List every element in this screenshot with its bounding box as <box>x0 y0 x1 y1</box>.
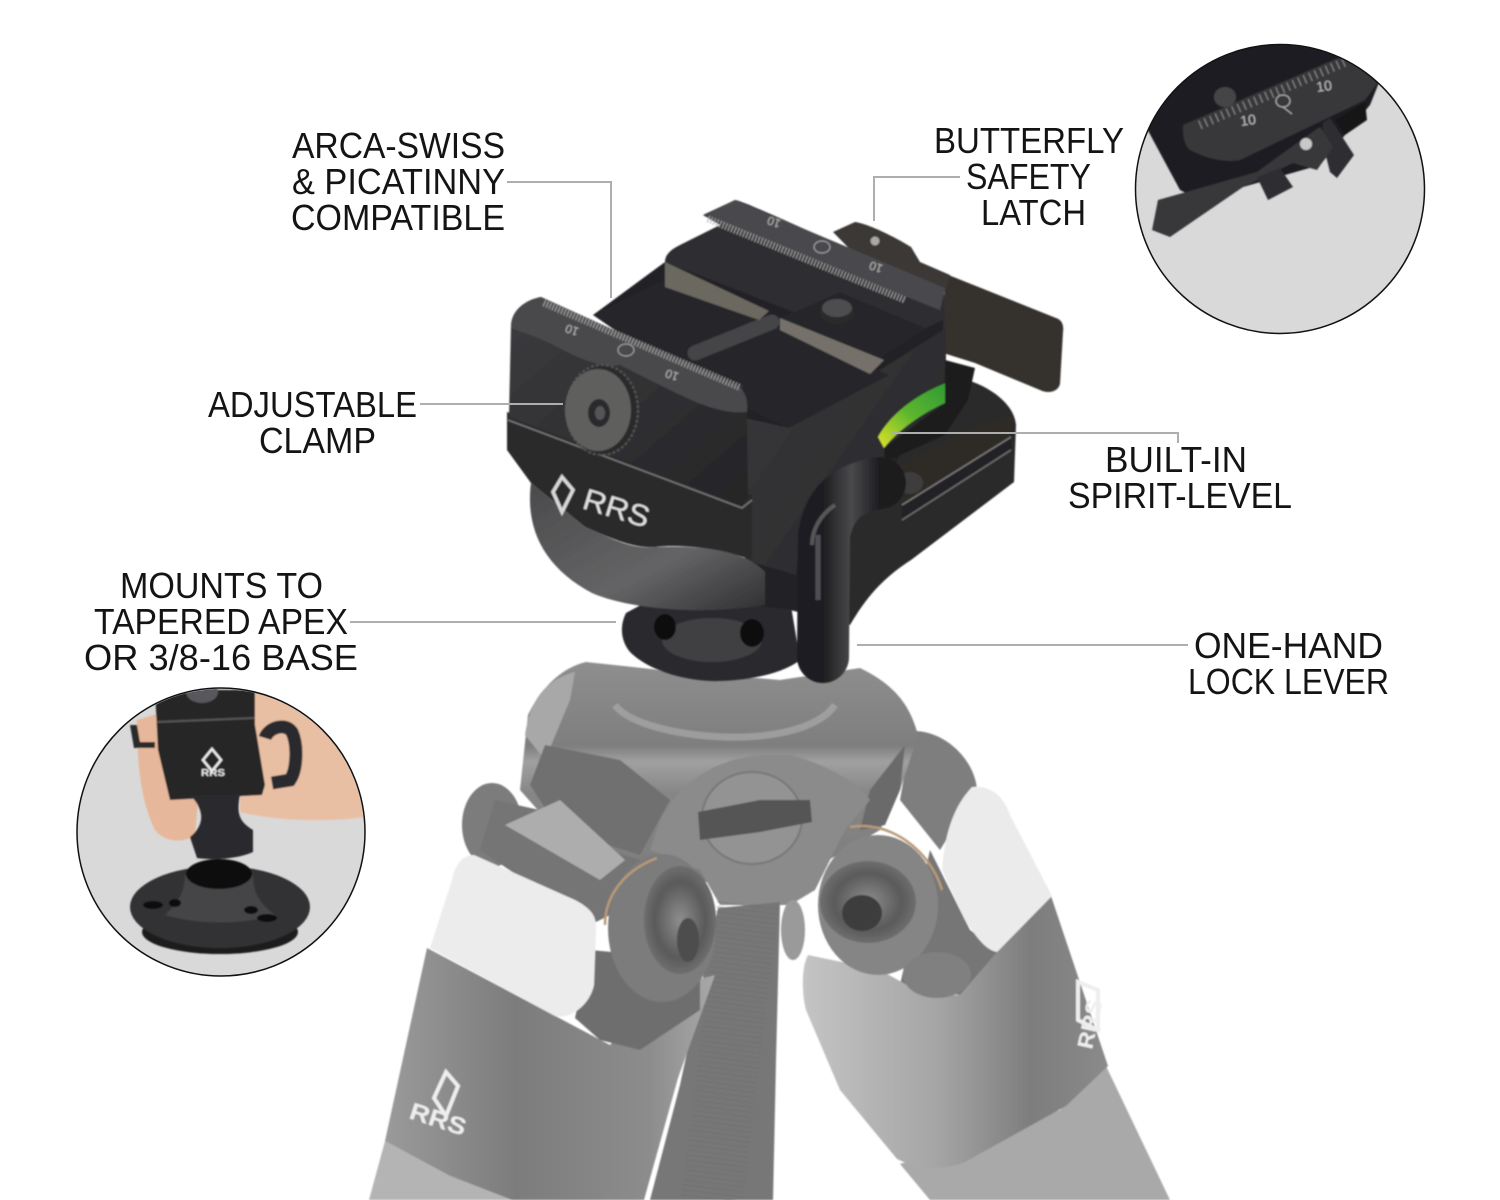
label: mounts to tapered apex <box>84 565 358 678</box>
faded tripod <box>369 662 1170 1200</box>
lever shadow arc highlight <box>615 705 835 737</box>
label: built-in spirit-level: BUILT-IN <box>1105 439 1247 480</box>
right stub knob <box>781 900 805 960</box>
leader: mounts to apex <box>350 621 616 623</box>
base holes <box>143 899 277 922</box>
lower hub shade right <box>860 745 905 830</box>
front ruler labels: 10 <box>563 321 581 339</box>
lever <box>265 727 296 783</box>
body logo <box>553 477 654 535</box>
adjustment knob <box>565 365 638 455</box>
central disk <box>650 755 870 905</box>
butterfly handle <box>940 274 1063 392</box>
apex hub <box>520 662 918 900</box>
label: mounts to tapered apex: MOUNTS TO <box>120 565 323 606</box>
left white block <box>430 855 596 1017</box>
rear jaw <box>665 200 945 350</box>
label: butterfly safety latch <box>934 120 1124 233</box>
rear ruler labels: 10 <box>867 258 885 276</box>
right white block <box>942 787 1052 952</box>
disk slot <box>702 772 802 864</box>
circle background <box>1135 44 1425 334</box>
callout circle: mounting base detail <box>77 681 365 976</box>
base flare <box>165 875 275 922</box>
leader: butterfly latch <box>874 177 960 221</box>
rear jaw screw <box>820 299 854 324</box>
label: built-in spirit-level: SPIRIT-LEVEL <box>1068 475 1292 516</box>
ruler plate <box>1183 58 1380 161</box>
right sleeve <box>803 896 1108 1168</box>
lock lever <box>812 483 880 657</box>
leader: lock lever <box>857 644 1188 646</box>
right hinge backing <box>900 850 1000 995</box>
slot <box>902 435 1012 520</box>
label: arca-swiss and picatinny compatible: ARCA-SWISS <box>292 125 505 166</box>
ball neck <box>622 600 800 681</box>
carbon leg tube right <box>900 1066 1170 1200</box>
rear tab <box>1322 118 1354 178</box>
label: adjustable clamp: CLAMP <box>259 420 376 461</box>
leader: adjustable clamp <box>420 403 563 405</box>
label: arca-swiss and picatinny compatible: COMPATIBLE <box>291 197 505 238</box>
left brass ring <box>605 858 657 925</box>
mounting ring <box>141 928 299 955</box>
front lower plate <box>507 412 752 560</box>
body side wall <box>745 287 946 575</box>
right hand <box>240 690 365 820</box>
right lower knob <box>903 952 971 998</box>
label: one-hand lock lever <box>1188 625 1389 702</box>
left sleeve <box>385 948 715 1200</box>
rear ruler ticks <box>708 219 905 300</box>
ruler marks: 10 <box>1315 77 1333 95</box>
left hinge cheek <box>505 800 625 880</box>
head logo: RRS <box>201 768 225 779</box>
label: one-hand lock lever: LOCK LEVER <box>1188 661 1389 702</box>
left lever stub <box>130 725 155 748</box>
ruler ticks <box>1200 62 1345 125</box>
left washer <box>608 854 716 1002</box>
strap <box>650 902 780 1200</box>
channel floor <box>593 280 889 428</box>
ruler marks: 10 <box>1239 111 1257 129</box>
round base plate <box>790 378 1016 625</box>
circle background <box>77 688 365 976</box>
rear knuckle right <box>900 731 977 850</box>
latch tab <box>1257 168 1293 200</box>
right brass ring <box>850 826 942 890</box>
ball and spigot <box>190 795 253 859</box>
label: butterfly safety latch: LATCH <box>981 192 1086 233</box>
left hex socket <box>677 918 699 962</box>
rear dark shoulder <box>1335 102 1367 135</box>
right washer <box>818 835 938 975</box>
wear strips <box>665 262 769 320</box>
neck highlight <box>662 618 762 662</box>
lower hub shade left <box>530 745 670 855</box>
rear ruler labels <box>765 213 885 276</box>
level vial <box>878 383 946 448</box>
circle outline <box>1136 44 1424 334</box>
neck holes <box>654 614 764 647</box>
jaw shoulder <box>780 292 926 358</box>
side lobe <box>525 672 575 760</box>
label: arca-swiss and picatinny compatible: & PICATINNY <box>292 161 505 202</box>
front ruler labels: 10 <box>663 366 681 384</box>
front ruler labels <box>563 321 681 384</box>
head body <box>155 690 265 800</box>
front ruler ticks <box>544 303 741 388</box>
mounting base <box>130 866 310 948</box>
logo left sleeve: RRS <box>406 1098 470 1142</box>
front top strip <box>511 297 747 412</box>
level housing <box>884 360 975 462</box>
seam <box>157 718 255 722</box>
rear ruler labels: 10 <box>765 213 783 231</box>
ruler marks <box>1240 80 1332 127</box>
label: mounts to tapered apex: TAPERED APEX <box>94 601 348 642</box>
right bolt dome <box>820 861 916 943</box>
carbon leg tube left <box>369 1141 512 1200</box>
front block <box>509 297 748 505</box>
base socket <box>186 859 252 889</box>
dial <box>186 689 219 704</box>
left fingers <box>137 710 200 840</box>
logo left sleeve <box>406 1072 470 1142</box>
left knob behind washer <box>575 950 700 1050</box>
label: butterfly safety latch: BUTTERFLY <box>934 120 1124 161</box>
logo right sleeve: RRS <box>1072 997 1107 1051</box>
label: adjustable clamp <box>208 384 417 461</box>
bowl <box>530 483 765 610</box>
label: one-hand lock lever: ONE-HAND <box>1194 625 1383 666</box>
bolt slot <box>698 800 812 840</box>
left bolt dome <box>644 866 716 974</box>
callout circle: butterfly latch detail <box>1130 30 1425 334</box>
latch body <box>1152 127 1333 237</box>
plate pin <box>1214 87 1236 107</box>
cross bar <box>695 322 772 353</box>
rear ruler strip <box>704 200 945 310</box>
front block seam <box>508 420 752 508</box>
label: butterfly safety latch: SAFETY <box>966 156 1091 197</box>
label: built-in spirit-level <box>1068 439 1292 516</box>
leader: arca-swiss <box>507 182 611 298</box>
dark base block <box>1148 45 1379 194</box>
circle outline <box>77 688 365 976</box>
latch pivot <box>1300 138 1312 150</box>
plate screw <box>897 472 923 494</box>
rear knuckle left <box>462 783 522 867</box>
product: clamp head <box>507 200 1063 681</box>
body logo: RRS <box>579 483 654 535</box>
right hex socket <box>842 895 882 931</box>
latch pin <box>870 236 880 246</box>
label: mounts to tapered apex: OR 3/8-16 BASE <box>84 637 358 678</box>
label: adjustable clamp: ADJUSTABLE <box>208 384 417 425</box>
hinge backing left <box>480 800 650 925</box>
leader: spirit level <box>892 433 1178 443</box>
rear latch <box>833 222 950 292</box>
label: arca-swiss and picatinny compatible <box>291 125 505 238</box>
head logo <box>201 749 225 779</box>
body backdrop <box>593 262 946 610</box>
